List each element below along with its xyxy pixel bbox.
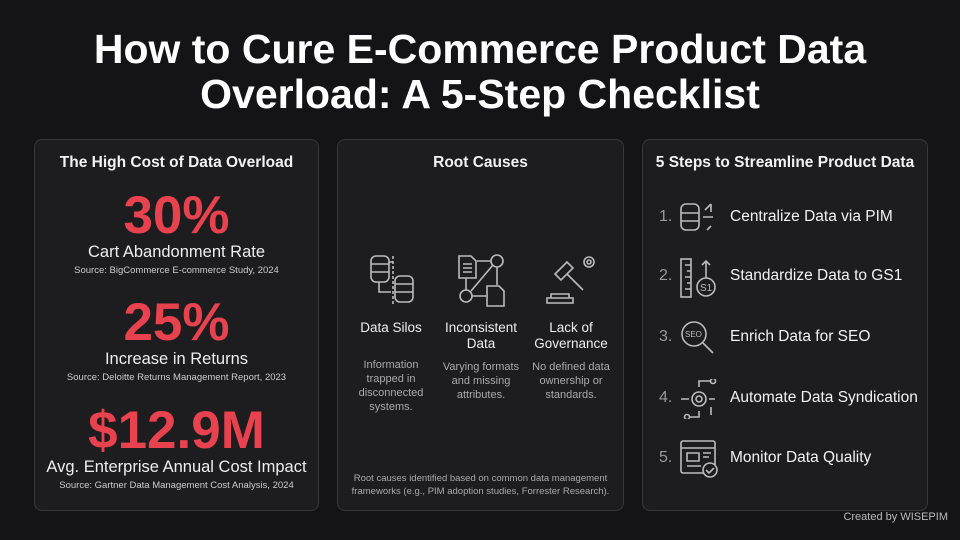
cause: governance: Lack of: [549, 320, 593, 335]
icon: seo magnifier: SEO: [685, 330, 702, 339]
heading: high cost: The High Cost of Data Overload: [60, 154, 293, 171]
heading: steps: 5 Steps to Streamline Product Data: [656, 154, 914, 171]
cause: inconsistent: Inconsistent: [445, 320, 517, 335]
icon: seo magnifier: [681, 321, 714, 354]
cause: inconsistent: [443, 254, 519, 401]
step 1: [659, 203, 893, 231]
stat: 30%: 30%: [123, 186, 230, 245]
stat: 25%: Source: Deloitte Returns Management Report, 2023: [67, 372, 286, 383]
panel: 5 steps: [642, 139, 928, 511]
cause: inconsistent: Data: [467, 336, 495, 351]
cause: data silos: Data Silos: [360, 320, 422, 335]
footnote: frameworks (e.g., PIM adoption studies, Forrester Research).: [352, 486, 609, 497]
step 5: Monitor Data Quality: [730, 449, 871, 466]
step 3: Enrich Data for SEO: [730, 328, 870, 345]
panel: high cost: [34, 139, 319, 511]
cause: data silos: Information trapped in disconnected systems.: [359, 359, 423, 413]
cause: governance: No defined data ownership or standards.: [532, 361, 610, 401]
stat: 25%: [67, 293, 286, 383]
cause: inconsistent: Varying formats and missing attributes.: [443, 361, 519, 401]
step 2: Standardize Data to GS1: [730, 267, 902, 284]
stat: 30%: Source: BigCommerce E-commerce Study, 2024: [74, 265, 279, 276]
cause: governance: Governance: [534, 336, 608, 351]
stat: 30%: Cart Abandonment Rate: [88, 243, 265, 261]
icon: gavel gear: [546, 256, 595, 304]
cause: governance: [532, 256, 610, 401]
footnote: [352, 473, 609, 497]
step 2: [659, 258, 902, 298]
step 5: 5.: [659, 449, 672, 466]
step 3: [659, 321, 870, 354]
step 1: 1.: [659, 208, 672, 225]
credit: Created by WISEPIM: [843, 511, 948, 523]
stat: 25%: 25%: [123, 293, 230, 352]
icon: gear network: [681, 379, 716, 419]
stat: 12.9M: Avg. Enterprise Annual Cost Impact: [46, 458, 307, 476]
heading: root causes: Root Causes: [433, 154, 528, 171]
step 4: Automate Data Syndication: [730, 389, 918, 406]
step 4: [659, 379, 918, 419]
step 1: Centralize Data via PIM: [730, 208, 893, 225]
cause: data silos: [359, 255, 423, 413]
step 4: 4.: [659, 389, 672, 406]
icon: docs network: [458, 254, 505, 307]
step 5: [659, 440, 872, 478]
step 3: 3.: [659, 328, 672, 345]
icon: ruler s1: S1: [700, 283, 713, 294]
title: Overload: A 5-Step Checklist: [200, 71, 760, 117]
icon: databases: [370, 255, 414, 304]
stat: 30%: [74, 186, 279, 276]
step 2: 2.: [659, 267, 672, 284]
panel: root causes: [337, 139, 624, 511]
stat: 12.9M: [46, 401, 307, 491]
icon: ruler s1: [680, 258, 716, 298]
title: [94, 26, 866, 117]
icon: monitor check: [680, 440, 718, 478]
stat: 25%: Increase in Returns: [105, 350, 248, 368]
stat: 12.9M: $12.9M: [88, 401, 265, 460]
stat: 12.9M: Source: Gartner Data Management Cost Analysis, 2024: [59, 480, 294, 491]
footnote: Root causes identified based on common data management: [354, 473, 607, 484]
icon: db arrows: [680, 203, 713, 231]
title: How to Cure E-Commerce Product Data: [94, 26, 866, 72]
